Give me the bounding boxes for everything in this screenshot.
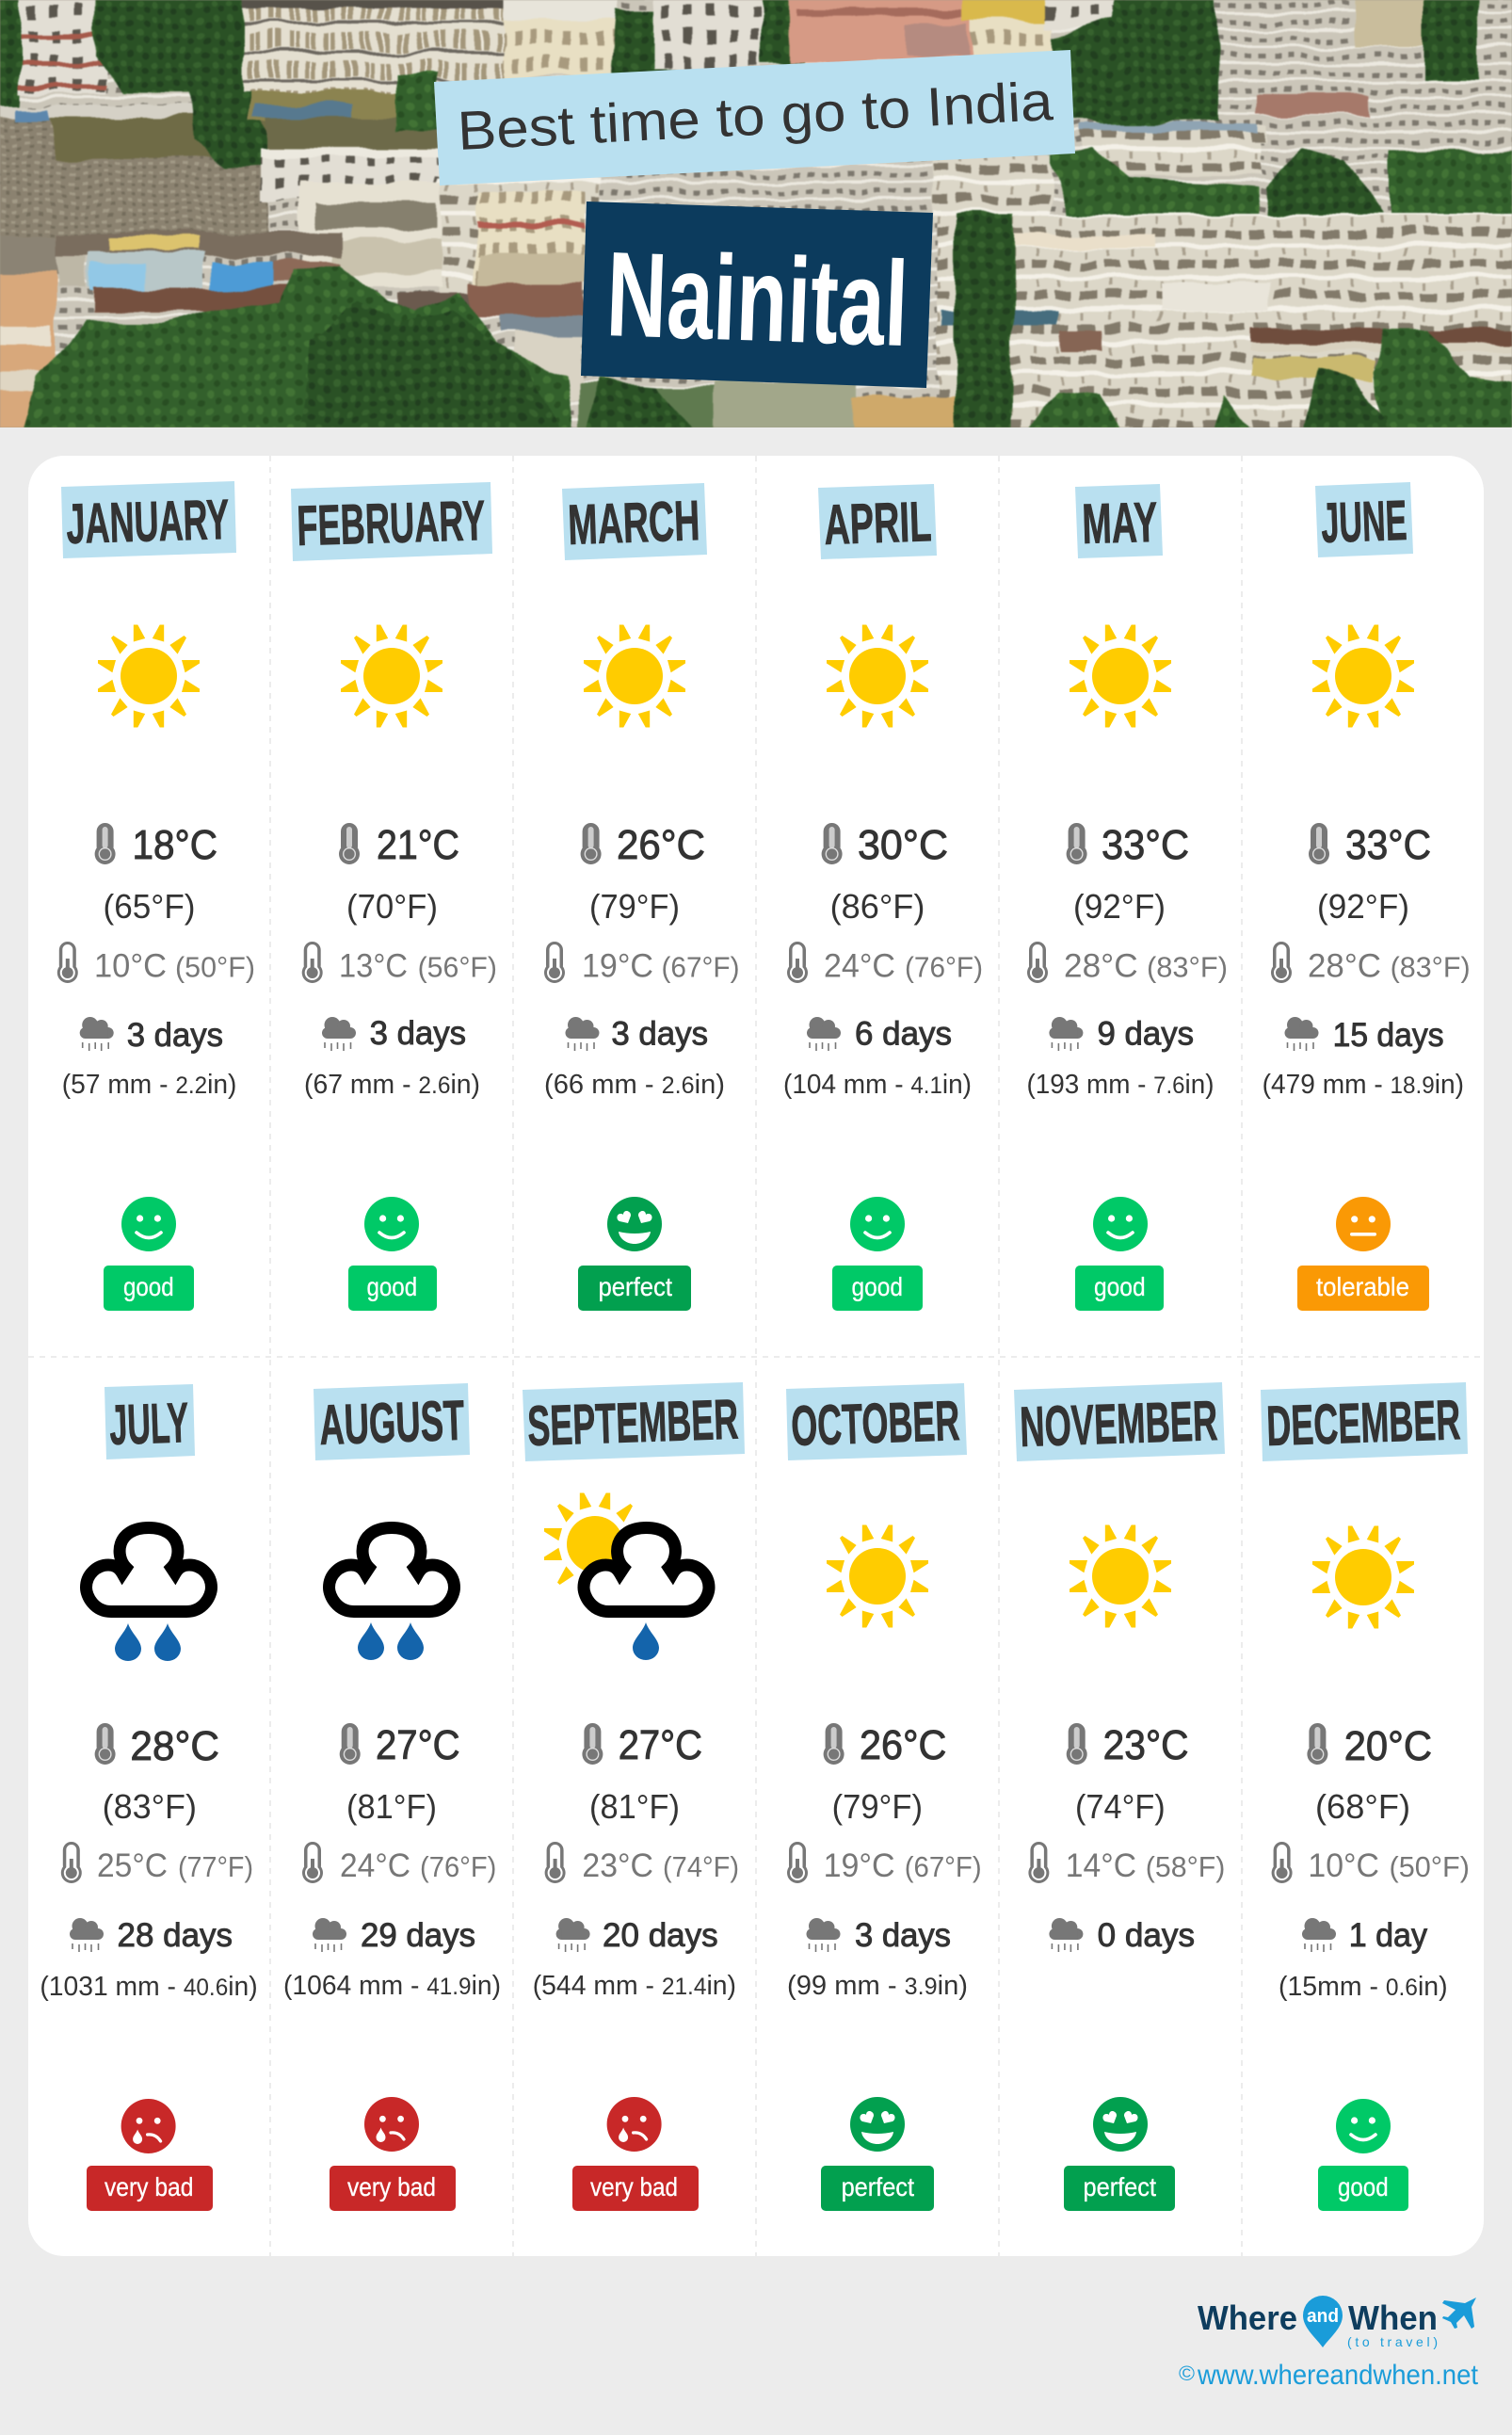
month heading: SEPTEMBER [526,1388,739,1458]
high temperature Fahrenheit: (86°F) [830,887,925,926]
high temperature Fahrenheit: (79°F) [832,1787,923,1826]
panel: August [283,1383,501,2211]
month heading: JANUARY [65,488,230,556]
rating: perfect: perfect [1083,2172,1156,2201]
website credit: © [1179,2362,1195,2385]
rainy days [1302,1917,1427,1954]
panel: October [786,1383,982,2211]
rainfall: (104 mm - 4.1in) [783,1070,972,1100]
high temperature: 33°C [1345,822,1431,868]
rainy days: 9 days [1098,1015,1194,1053]
low temperature: 24°C [824,947,895,985]
rainy days: 0 days [1098,1917,1195,1954]
website credit: www.whereandwhen.net [1197,2360,1479,2391]
high temperature: 26°C [617,822,705,868]
high temperature Fahrenheit: (70°F) [346,887,438,926]
rainy days: 3 days [370,1015,466,1052]
icon: sun [1070,1525,1171,1627]
month heading [818,484,937,559]
low temperature: (83°F) [1147,951,1228,983]
low temperature: (67°F) [661,951,740,983]
title: Nainital [581,202,933,388]
high temperature [1307,1723,1432,1769]
rainfall: (1064 mm - 41.9in) [283,1971,501,2001]
rating: very bad [572,2097,699,2211]
rainfall: (479 mm - 18.9in) [1263,1070,1464,1100]
month heading: NOVEMBER [1019,1389,1218,1459]
rating: good: good [367,1272,417,1301]
high temperature Fahrenheit: (81°F) [589,1787,680,1826]
high temperature: 30°C [858,822,948,868]
month heading [291,482,492,561]
header photo: hillside town of Nainital [0,0,1512,446]
low temperature: (67°F) [905,1850,982,1883]
high temperature [581,822,705,868]
rating: perfect [578,1197,691,1311]
rating: perfect: perfect [599,1272,672,1301]
rating: good [1075,1197,1164,1311]
high temperature: 27°C [376,1722,460,1768]
high temperature: 27°C [619,1722,702,1768]
rating: very bad [87,2099,213,2211]
high temperature [824,1722,946,1768]
high temperature Fahrenheit: (74°F) [1075,1787,1166,1826]
low temperature: (76°F) [420,1850,496,1883]
rainy days: 15 days [1333,1017,1444,1054]
low temperature [302,1842,496,1884]
panel: September [523,1382,745,2211]
low temperature: 14°C [1066,1847,1136,1884]
low temperature [1028,1842,1225,1884]
month heading [523,1382,745,1461]
low temperature [1271,942,1471,985]
title: Nainital: Nainital [604,227,910,372]
icon: sun [98,625,200,727]
rating: tolerable: tolerable [1316,1272,1409,1301]
high temperature: 23°C [1103,1722,1189,1768]
low temperature: 13°C [339,947,408,985]
low temperature: (76°F) [905,951,983,983]
icon: rain cloud with two drops [87,1527,211,1661]
low temperature: 24°C [340,1847,410,1884]
panel: monthly calendar card [28,456,1484,2256]
rainfall: (57 mm - 2.2in) [62,1070,236,1100]
icon: sun behind rain cloud with one drop [544,1493,709,1660]
panel: April [783,484,983,1311]
rainy days [565,1015,708,1053]
rating: good: good [1094,1272,1146,1301]
panel: May [1026,484,1228,1311]
rainy days [806,1917,951,1954]
panel: December [1261,1382,1470,2211]
rainy days: 3 days [855,1917,951,1954]
month heading: AUGUST [318,1389,465,1457]
rating: good: good [1338,2172,1389,2201]
icon: sun [1312,1525,1414,1629]
high temperature Fahrenheit: (92°F) [1073,887,1166,926]
month heading: JULY [108,1391,189,1457]
icon: sun [1070,625,1171,727]
logo: Where and When (to travel): (to travel) [1347,2334,1438,2349]
high temperature Fahrenheit: (81°F) [346,1787,437,1826]
high temperature: 33°C [1102,822,1189,868]
low temperature: (50°F) [1390,1850,1470,1883]
low temperature: (83°F) [1391,951,1471,983]
icon: sun [584,625,685,727]
low temperature [61,1842,253,1884]
panel: January [57,481,255,1311]
logo: Where and When (to travel): Where [1198,2298,1297,2337]
panel: July [40,1384,258,2211]
rainfall: (544 mm - 21.4in) [533,1971,736,2001]
high temperature: 18°C [132,822,217,868]
rating: perfect [821,2097,934,2211]
month heading: FEBRUARY [296,489,486,557]
title ribbon: Best time to go to India: Best time to go to India [456,71,1055,162]
rating: good [1318,2099,1408,2211]
low temperature: 28°C [1064,947,1138,985]
rainy days: 20 days [603,1917,718,1954]
rating: good [104,1197,194,1311]
month heading: JUNE [1320,489,1407,555]
high temperature [582,1722,702,1768]
rainy days: 3 days [611,1015,708,1053]
month heading [1075,484,1163,558]
icon: map pin with and [1303,2296,1343,2347]
month heading: MAY [1081,491,1158,556]
rainy days [1049,1015,1194,1053]
month heading: MARCH [567,489,700,556]
month heading [1315,482,1413,557]
low temperature: 10°C [1308,1847,1379,1884]
low temperature: 28°C [1308,947,1381,985]
high temperature Fahrenheit: (65°F) [104,887,196,926]
logo: Where and When (to travel): When [1348,2298,1438,2337]
month heading: APRIL [823,490,932,556]
rating: perfect [1064,2097,1175,2211]
high temperature [1067,822,1189,868]
low temperature [787,1842,982,1884]
low temperature: (58°F) [1146,1850,1225,1883]
rating: very bad: very bad [105,2172,193,2201]
month heading [61,481,236,558]
low temperature [1272,1842,1470,1884]
icon: airplane [1442,2298,1476,2329]
low temperature [544,942,740,985]
month heading [1014,1382,1225,1461]
rainfall: (1031 mm - 40.6in) [40,1972,258,2002]
rating: good: good [123,1272,174,1301]
icon: sun [827,625,928,727]
icon: sun [341,625,442,727]
rainy days: 6 days [855,1015,952,1053]
rating: good [348,1197,437,1311]
low temperature: (50°F) [175,951,255,983]
high temperature Fahrenheit: (83°F) [103,1787,197,1826]
rainfall: (15mm - 0.6in) [1279,1972,1448,2002]
low temperature [57,942,255,985]
rating: good: good [851,1272,903,1301]
high temperature [339,822,459,868]
rainy days [1049,1917,1195,1954]
rainfall: (66 mm - 2.6in) [544,1070,725,1100]
panel: June [1263,482,1471,1311]
high temperature: 26°C [860,1722,946,1768]
low temperature: 23°C [582,1847,653,1884]
rating: good [832,1197,923,1311]
rainy days [1284,1017,1444,1054]
high temperature: 28°C [130,1723,219,1769]
icon: sun [827,1525,928,1627]
month heading [786,1383,967,1460]
high temperature [95,1723,219,1769]
rating: perfect: perfect [842,2172,914,2201]
low temperature: 19°C [582,947,653,985]
rainy days [807,1015,952,1053]
month heading: OCTOBER [790,1389,960,1458]
rating: tolerable [1297,1197,1429,1311]
month heading [562,483,707,560]
high temperature Fahrenheit: (68°F) [1315,1787,1410,1826]
high temperature Fahrenheit: (79°F) [589,887,680,926]
rainy days: 1 day [1349,1917,1427,1954]
icon: sun [1312,625,1414,727]
high temperature [1309,822,1431,868]
rainy days: 28 days [117,1917,233,1954]
low temperature [545,1842,739,1884]
rainfall: (99 mm - 3.9in) [787,1971,968,2001]
icon: map pin with and: and [1307,2306,1339,2327]
low temperature: 25°C [97,1847,168,1884]
panel: November [1014,1382,1225,2211]
low temperature [787,942,983,985]
rating: very bad: very bad [590,2172,678,2201]
month heading [314,1383,470,1460]
rating: very bad: very bad [347,2172,436,2201]
low temperature: (74°F) [663,1850,739,1883]
title ribbon: Best time to go to India [434,50,1075,185]
rainfall: (193 mm - 7.6in) [1026,1070,1214,1100]
rating: very bad [330,2097,456,2211]
icon: rain cloud with two drops [330,1527,454,1660]
rainfall: (67 mm - 2.6in) [304,1070,480,1100]
low temperature [302,942,497,985]
rainy days [322,1015,466,1052]
high temperature: 20°C [1344,1723,1432,1769]
high temperature: 21°C [377,822,459,868]
panel: March [544,483,740,1311]
high temperature Fahrenheit: (92°F) [1317,887,1409,926]
low temperature [1027,942,1228,985]
rainy days: 3 days [127,1017,223,1054]
low temperature: (56°F) [418,951,497,983]
rainy days [80,1017,223,1054]
low temperature: 10°C [94,947,167,985]
logo: Where and When (to travel) [1198,2296,1476,2349]
high temperature [1067,1722,1189,1768]
low temperature: (77°F) [178,1850,253,1883]
high temperature [95,822,217,868]
month heading [105,1384,195,1459]
low temperature: 19°C [824,1847,895,1884]
rainy days: 29 days [361,1917,475,1954]
panel: February [291,482,497,1311]
high temperature [340,1722,460,1768]
